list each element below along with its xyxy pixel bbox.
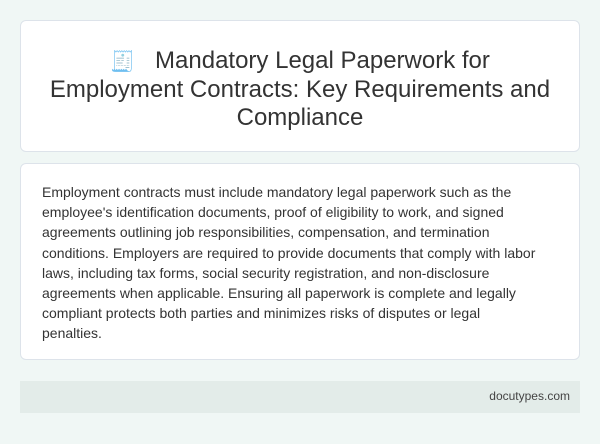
description text: penalties. xyxy=(42,325,102,341)
description text: conditions. Employers are required to provide documents that comply with labor xyxy=(42,245,535,261)
description text: agreements when applicable. Ensuring all paperwork is complete and legally xyxy=(42,285,516,301)
description text xyxy=(42,184,536,341)
header card xyxy=(20,20,580,152)
description text: employee's identification documents, proof of eligibility to work, and signed xyxy=(42,204,504,220)
footer xyxy=(20,381,580,413)
description text: laws, including tax forms, social security registration, and non-disclosure xyxy=(42,265,489,281)
description text: compliant protects both parties and minimizes risks of disputes or legal xyxy=(42,305,480,321)
footer: docutypes.com xyxy=(489,389,570,403)
title: 🧾 Mandatory Legal Paperwork for Employment Contracts: Key Requirements and Compliance xyxy=(50,47,550,131)
description text: Employment contracts must include mandatory legal paperwork such as the xyxy=(42,184,511,200)
body card xyxy=(20,163,580,360)
description text: agreements outlining job responsibilities, compensation, and termination xyxy=(42,224,489,240)
